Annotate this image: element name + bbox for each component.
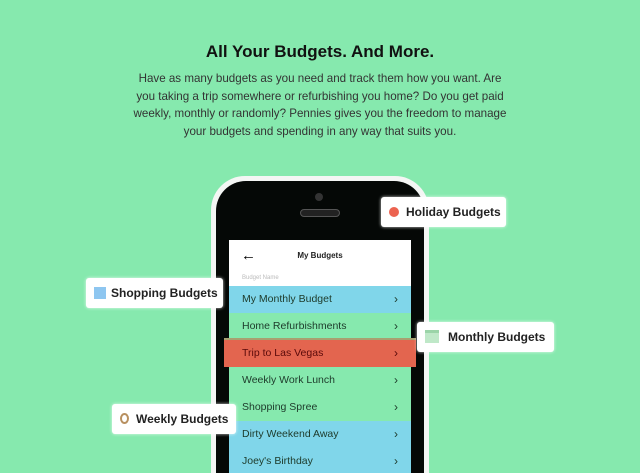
label: Shopping Budgets bbox=[86, 278, 223, 308]
speaker bbox=[300, 209, 340, 217]
icon: sun bbox=[389, 207, 399, 217]
title: All Your Budgets. And More. bbox=[206, 42, 434, 61]
icon: shopping bag bbox=[94, 287, 106, 299]
budget list: Trip to Las Vegas bbox=[242, 347, 323, 359]
budget list: › bbox=[394, 346, 398, 360]
label: Monthly Budgets: Monthly Budgets bbox=[448, 330, 545, 344]
budget list: › bbox=[394, 427, 398, 441]
budget list: Dirty Weekend Away bbox=[242, 428, 338, 440]
label: Monthly Budgets bbox=[417, 322, 554, 352]
budget list: › bbox=[394, 454, 398, 468]
budget list: › bbox=[394, 400, 398, 414]
phone screen: Budget Name bbox=[242, 275, 279, 281]
screen title: My Budgets bbox=[297, 251, 343, 260]
icon: watch bbox=[120, 413, 129, 424]
back arrow: ← bbox=[241, 247, 256, 264]
budget list: Home Refurbishments bbox=[242, 320, 346, 332]
budget list: Shopping Spree bbox=[242, 401, 317, 413]
budget list: Joey's Birthday bbox=[242, 455, 313, 467]
icon: calendar bbox=[425, 330, 439, 343]
label: Weekly Budgets: Weekly Budgets bbox=[136, 412, 228, 426]
budget list: › bbox=[394, 373, 398, 387]
camera bbox=[315, 193, 323, 201]
phone bbox=[211, 176, 429, 473]
phone screen bbox=[229, 240, 411, 473]
description text: Have as many budgets as you need and track them how you want. Are you taking a trip somewhere or refurbishing you home? Do you get paid weekly, monthly or randomly? Pennies gives you the freedom to manage your budgets and spending in any way that suits you. bbox=[134, 72, 506, 138]
label: Holiday Budgets: Holiday Budgets bbox=[406, 205, 501, 219]
label: Holiday Budgets bbox=[381, 197, 506, 227]
budget list: › bbox=[394, 319, 398, 333]
budget list: › bbox=[394, 292, 398, 306]
label: Weekly Budgets bbox=[112, 404, 236, 434]
budget list: My Monthly Budget bbox=[242, 293, 332, 305]
label: Shopping Budgets: Shopping Budgets bbox=[111, 286, 218, 300]
budget list: Weekly Work Lunch bbox=[242, 374, 335, 386]
